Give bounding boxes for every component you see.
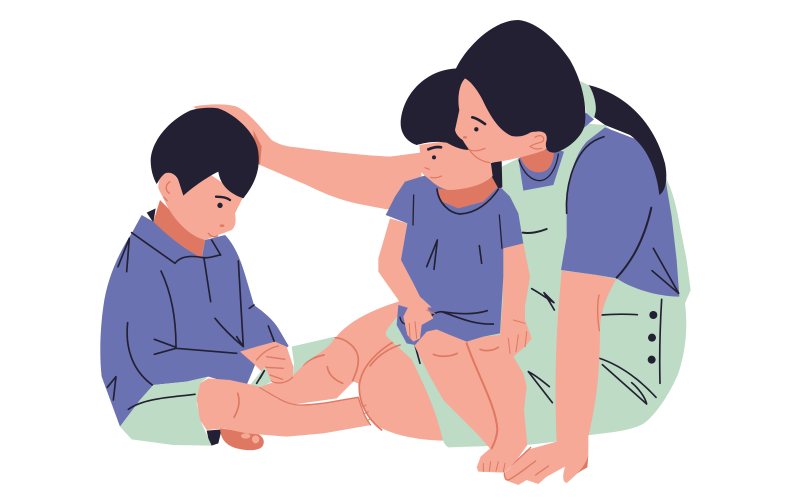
child: arms xyxy=(378,218,532,357)
child: legs xyxy=(370,329,527,473)
child: hands xyxy=(403,303,527,353)
boy: shorts xyxy=(120,377,212,446)
boy: hand and fist xyxy=(240,342,293,388)
mother: arm to floor xyxy=(504,271,616,485)
mother: arm on boy's head xyxy=(193,104,423,209)
boy: leg xyxy=(197,378,371,437)
mother: ponytail xyxy=(588,85,666,195)
mother: strap xyxy=(580,81,596,118)
mother: collar and neck xyxy=(518,147,564,191)
mother: overalls and back xyxy=(386,81,691,447)
boy: head xyxy=(151,108,259,240)
boy: shirt xyxy=(100,200,289,427)
mother: purple shirt xyxy=(561,127,679,297)
child: shirt xyxy=(386,175,523,345)
mother: folded leg xyxy=(260,302,473,441)
mother: head xyxy=(455,20,585,163)
mother: overalls details xyxy=(415,137,679,404)
boy: foot xyxy=(207,428,264,450)
child: hair and face xyxy=(401,68,502,190)
